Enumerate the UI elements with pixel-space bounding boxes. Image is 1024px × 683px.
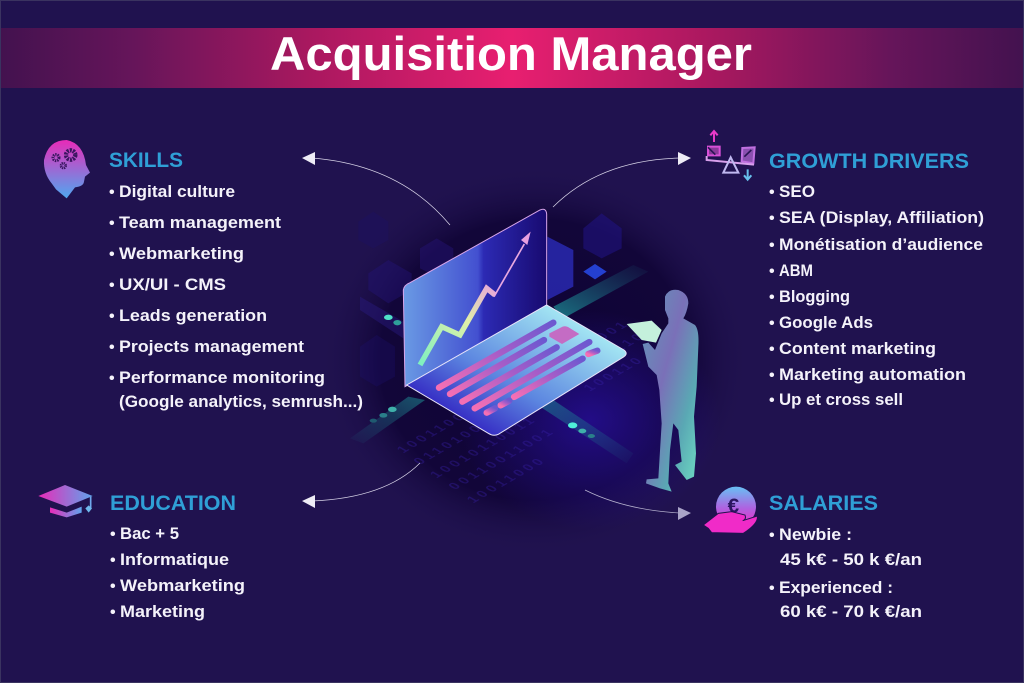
growth drivers list: • [769, 289, 775, 306]
salaries list: 45 k€ - 50 k €/an [780, 551, 922, 569]
panel: education [38, 485, 245, 621]
skills list: • [109, 370, 115, 387]
panel: growth drivers [707, 131, 984, 409]
growth drivers list: • [769, 184, 775, 201]
laptop screen [403, 209, 547, 387]
title: Acquisition Manager [270, 27, 752, 80]
arrow: to skills [302, 152, 450, 225]
skills list: Leads generation [119, 307, 267, 325]
skills list: (Google analytics, semrush...) [119, 393, 363, 411]
skills list: Projects management [119, 338, 305, 356]
binary pattern: 10011000 [463, 455, 550, 505]
salaries list: • [769, 527, 775, 544]
binary pattern: 100110 [580, 354, 648, 393]
heading: salaries: SALARIES [769, 492, 878, 515]
education list: Informatique [120, 551, 229, 569]
rising chart arrow [420, 232, 531, 365]
binary pattern: 01101001100 [410, 401, 524, 466]
education list: • [110, 552, 116, 569]
binary pattern: 10011001 [546, 318, 633, 368]
growth drivers list: Up et cross sell [779, 391, 903, 409]
heading: growth drivers: GROWTH DRIVERS [769, 150, 969, 173]
skills list: • [109, 215, 115, 232]
panel: salaries [703, 487, 922, 621]
laptop [403, 209, 626, 435]
skills list: • [109, 184, 115, 201]
title banner [1, 28, 1023, 88]
education list: Webmarketing [120, 577, 245, 595]
growth drivers list: ABM [779, 262, 813, 280]
growth drivers list: • [769, 263, 775, 280]
person [627, 290, 699, 492]
skills list: • [109, 277, 115, 294]
heading: skills: SKILLS [109, 149, 183, 172]
skills list: Performance monitoring [119, 369, 325, 387]
education list: Bac + 5 [120, 525, 179, 543]
growth drivers list: • [769, 315, 775, 332]
arrow: to education [302, 463, 420, 508]
glowing dots [370, 315, 595, 438]
icon: hand holding euro coin: € [728, 495, 740, 518]
growth drivers list: Content marketing [779, 340, 936, 358]
education list: Marketing [120, 603, 205, 621]
conveyor strips [553, 265, 648, 318]
salaries list: • [769, 580, 775, 597]
binary pattern: 10011001011 [393, 389, 507, 455]
skills list [109, 183, 363, 411]
growth drivers list: Blogging [779, 288, 850, 306]
education list [110, 525, 245, 621]
growth drivers list: • [769, 392, 775, 409]
keyboard panel [407, 305, 626, 435]
text bars [439, 323, 597, 413]
binary pattern [393, 318, 649, 505]
binary pattern: 01100110 [563, 330, 649, 380]
growth drivers list: • [769, 210, 775, 227]
growth drivers list: Marketing automation [779, 366, 966, 384]
salaries list: Newbie : [779, 526, 852, 544]
growth drivers list: Google Ads [779, 314, 873, 332]
binary pattern: 10010110011 [426, 414, 541, 480]
salaries list: Experienced : [779, 579, 893, 597]
chip [549, 326, 579, 344]
growth drivers list: SEA (Display, Affiliation) [779, 209, 984, 227]
skills list: • [109, 308, 115, 325]
tablet [627, 321, 662, 343]
growth drivers list: • [769, 237, 775, 254]
growth drivers list: SEO [779, 183, 815, 201]
silhouette [643, 290, 699, 492]
arrow: to growth drivers [553, 152, 691, 207]
isometric blocks [358, 212, 622, 387]
growth drivers list: • [769, 367, 775, 384]
skills list: Digital culture [119, 183, 235, 201]
skills list: • [109, 246, 115, 263]
education list: • [110, 526, 116, 543]
skills list: Team management [119, 214, 282, 232]
icon: graduation cap [38, 485, 93, 517]
icon: hand holding euro coin [703, 487, 757, 533]
icon: head with gears [44, 140, 90, 198]
education list: • [110, 604, 116, 621]
arrow: to salaries [585, 490, 691, 520]
icon: balance scale [707, 131, 755, 180]
panel: skills [44, 140, 363, 411]
skills list: Webmarketing [119, 245, 244, 263]
heading: education: EDUCATION [110, 492, 236, 515]
salaries list: 60 k€ - 70 k €/an [780, 603, 922, 621]
growth drivers list: Monétisation d’audience [779, 236, 983, 254]
education list: • [110, 578, 116, 595]
growth drivers list: • [769, 341, 775, 358]
skills list: • [109, 339, 115, 356]
growth drivers list [769, 183, 984, 409]
binary pattern: 00110011001 [445, 426, 559, 491]
salaries list [769, 526, 922, 621]
central illustration [320, 165, 750, 555]
skills list: UX/UI - CMS [119, 276, 226, 294]
